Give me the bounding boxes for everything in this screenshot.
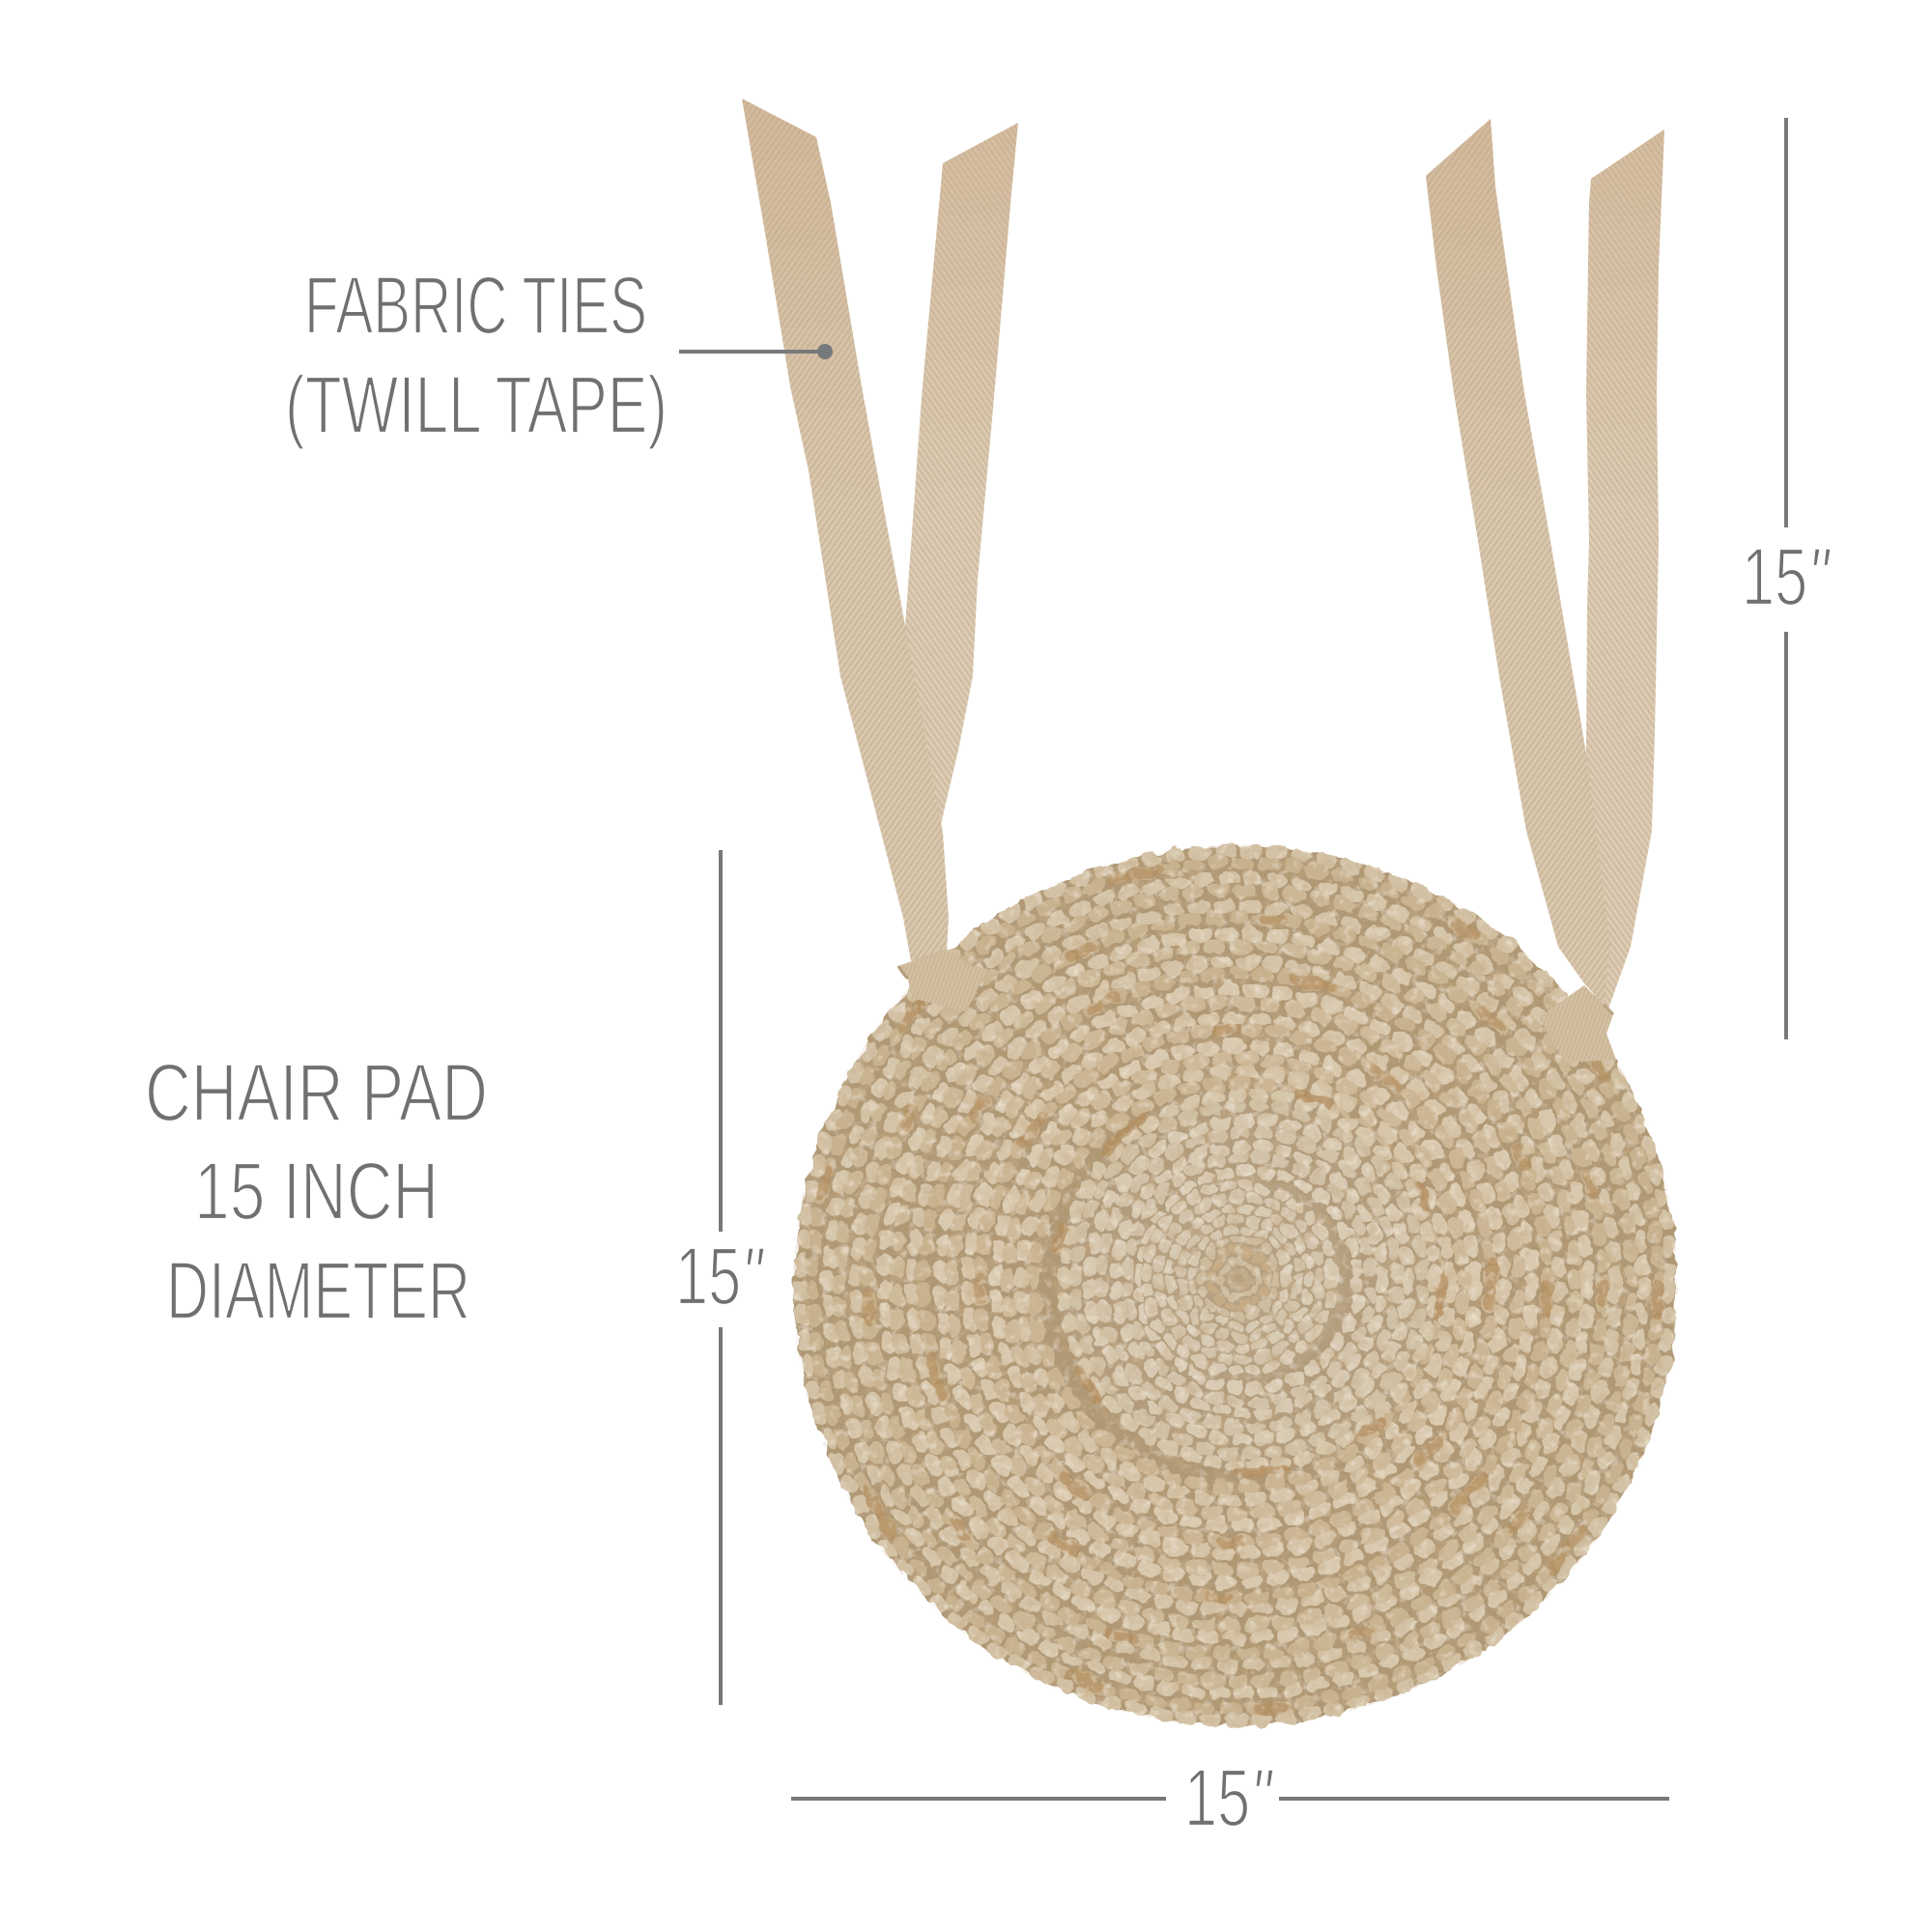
label: chair pad size xyxy=(145,1047,488,1336)
infographic canvas xyxy=(149,99,1830,1826)
label: fabric ties: (TWILL TAPE) xyxy=(285,359,668,450)
label: chair pad size: DIAMETER xyxy=(166,1245,470,1336)
braided jute chair pad xyxy=(792,840,1681,1729)
label: fabric ties xyxy=(285,260,668,450)
label: chair pad size: CHAIR PAD xyxy=(145,1047,488,1138)
left tie knot xyxy=(898,950,988,1011)
dimension: pad width 15 inches: 15" xyxy=(1184,1752,1273,1843)
fabric ties, left pair xyxy=(742,99,1018,961)
right tie knot xyxy=(1539,985,1616,1063)
dimension: pad height 15 inches xyxy=(675,850,764,1705)
dimension: pad height 15 inches: 15" xyxy=(675,1231,764,1321)
fabric ties, right pair xyxy=(1426,119,1664,1014)
leader line to fabric ties xyxy=(679,344,833,359)
label: fabric ties: FABRIC TIES xyxy=(304,260,647,351)
dimension: tie length 15 inches xyxy=(1742,118,1831,1039)
label: chair pad size: 15 INCH xyxy=(194,1146,439,1236)
dimension: tie length 15 inches: 15" xyxy=(1742,531,1831,622)
dimension: pad width 15 inches xyxy=(791,1752,1669,1843)
